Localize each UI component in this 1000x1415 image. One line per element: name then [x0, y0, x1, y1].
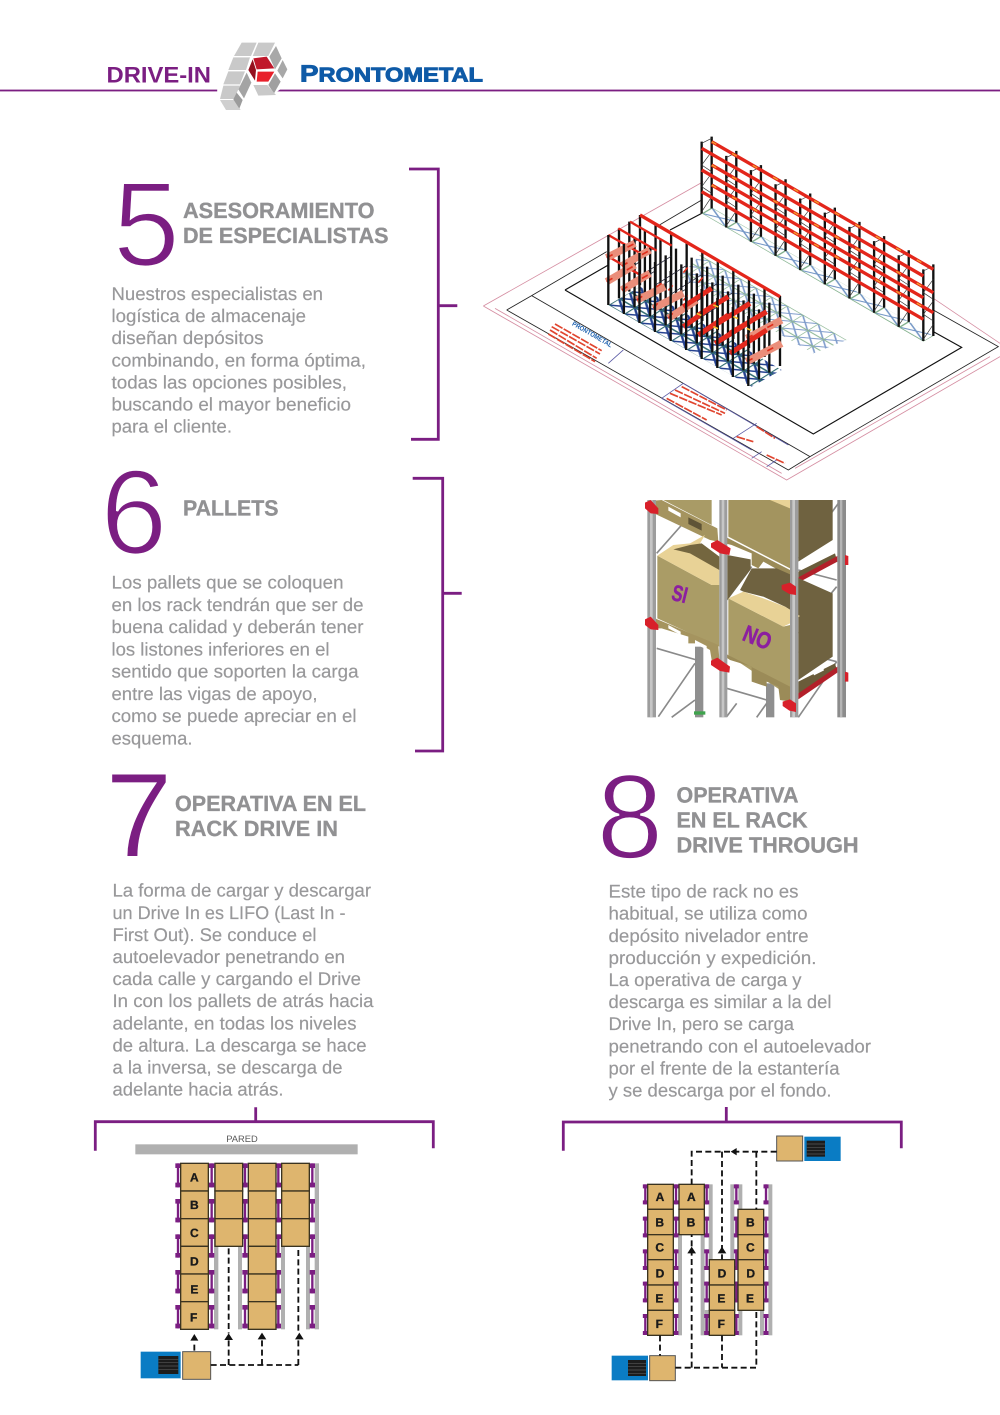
body text: un Drive In es LIFO (Last In -: [112, 902, 346, 923]
pallets column 3: F: [718, 1317, 725, 1331]
drive-in rack: [607, 215, 782, 387]
bracket: [95, 1107, 433, 1151]
section label: Drive-In: DRIVE-IN: [106, 62, 211, 87]
bracket: [409, 169, 457, 439]
heading: [175, 791, 366, 841]
body text: Este tipo de rack no es: [608, 880, 798, 902]
number 5: 5: [113, 158, 180, 292]
heading: PALLETS: [183, 496, 278, 521]
panel: 6 pallets: [100, 446, 462, 751]
title block: PRONTOMETAL: [571, 320, 613, 349]
pallets column 1: D: [656, 1266, 664, 1280]
panel: 5 asesoramiento: [112, 158, 457, 439]
heading: RACK DRIVE IN: [175, 816, 338, 841]
body text: In con los pallets de atrás hacia: [112, 990, 374, 1011]
body text: los listones inferiores en el: [112, 638, 330, 659]
route arrows: [190, 1248, 304, 1365]
body text: autoelevador penetrando en: [112, 946, 345, 967]
body text: [112, 283, 366, 437]
panel: 7 operativa drive in: [95, 748, 433, 1151]
body text: depósito nivelador entre: [608, 925, 808, 946]
heading: [183, 198, 388, 248]
body text: adelante, en todas los niveles: [112, 1012, 356, 1033]
body text: entre las vigas de apoyo,: [112, 683, 318, 704]
pallets column 2: B: [687, 1215, 695, 1229]
pallets column A-F: E: [190, 1282, 198, 1296]
icon: Prontometal logo mark: [217, 37, 293, 113]
pallets column A-F: B: [190, 1198, 199, 1212]
brand name: Prontometal: PRONTOMETAL: [300, 61, 483, 87]
body text: First Out). Se conduce el: [112, 924, 316, 945]
pallets column A-F: F: [190, 1310, 197, 1324]
pallet SI: [655, 535, 751, 660]
body text: penetrando con el autoelevador: [608, 1035, 871, 1056]
body text: producción y expedición.: [608, 947, 816, 968]
header rule: [0, 90, 1000, 91]
body text: por el frente de la estantería: [608, 1058, 840, 1078]
body text: La forma de cargar y descargar: [112, 880, 371, 901]
wall label: PARED: [226, 1134, 258, 1144]
pallets column 4: C: [746, 1241, 755, 1254]
label: NO: NO: [739, 620, 776, 655]
front uprights: [647, 500, 846, 717]
red beam connectors: [645, 500, 848, 712]
pallets column 3: E: [717, 1292, 725, 1305]
body text: combinando, en forma óptima,: [112, 349, 366, 370]
body text: como se puede apreciar en el: [112, 705, 356, 726]
rack uprights: [178, 1163, 319, 1329]
pallets column A-F: A: [190, 1170, 199, 1184]
front lattice extension: [680, 255, 847, 353]
pallets column 2: [679, 1184, 704, 1235]
pallets column 4: D: [746, 1266, 755, 1280]
body text: logística de almacenaje: [112, 305, 306, 326]
pallets column 4: E: [746, 1292, 754, 1305]
pallets column 1: F: [656, 1317, 663, 1331]
body text: adelante hacia atrás.: [112, 1079, 284, 1100]
body text: buscando el mayor beneficio: [112, 394, 351, 414]
route arrows: [660, 1148, 777, 1368]
heading: ASESORAMIENTO: [183, 198, 374, 223]
body text: [112, 572, 364, 748]
body text: todas las opciones posibles,: [112, 371, 347, 392]
number 7: 7: [106, 748, 172, 882]
diagram: drive-in operation: [135, 1134, 358, 1379]
heading: EN EL RACK: [676, 807, 808, 832]
forklift: exit: [777, 1136, 841, 1161]
pallets other columns: [215, 1163, 309, 1329]
forklift: entry: [612, 1356, 675, 1381]
body text: Nuestros especialistas en: [112, 283, 323, 304]
body text: buena calidad y deberán tener: [112, 616, 364, 637]
body text: diseñan depósitos: [112, 327, 264, 348]
rack uprights: [645, 1184, 772, 1335]
body text: en los rack tendrán que ser de: [112, 594, 364, 615]
body text: a la inversa, se descarga de: [112, 1056, 342, 1078]
body text: esquema.: [112, 727, 192, 748]
body text: La operativa de carga y: [608, 969, 802, 990]
body text: [608, 880, 871, 1101]
pallets column 3: D: [718, 1266, 726, 1280]
panel: 8 operativa drive through: [563, 750, 901, 1151]
pallets column 1: A: [656, 1190, 664, 1204]
heading: DE ESPECIALISTAS: [183, 223, 388, 248]
body text: de altura. La descarga se hace: [112, 1034, 366, 1055]
label: SI: SI: [669, 580, 690, 608]
diagram: drive-through operation: [612, 1136, 841, 1381]
heading: [676, 782, 858, 857]
forklift: [141, 1352, 211, 1379]
number 8: 8: [596, 750, 663, 884]
body text: para el cliente.: [112, 416, 232, 437]
header: [0, 37, 1000, 113]
pallets column 2: A: [687, 1190, 696, 1204]
body text: descarga es similar a la del: [608, 991, 832, 1012]
pallets column A-F: [181, 1163, 208, 1329]
title block: [548, 320, 788, 467]
body text: [112, 880, 374, 1100]
heading: OPERATIVA EN EL: [175, 791, 366, 816]
pallets column A-F: D: [190, 1254, 199, 1268]
body text: Drive In, pero se carga: [608, 1013, 795, 1034]
pallets column A-F: C: [190, 1226, 199, 1240]
pallets column 4: [738, 1209, 764, 1310]
plan outline: [483, 182, 1000, 480]
pallets column 1: E: [655, 1292, 663, 1305]
upper pallets: [654, 500, 837, 583]
heading: DRIVE THROUGH: [676, 832, 858, 857]
pallets column 3: [709, 1260, 735, 1335]
body text: y se descarga por el fondo.: [608, 1080, 832, 1101]
bracket: [413, 478, 462, 751]
back rack floor lattice: [702, 207, 933, 342]
rear uprights and braces: [657, 503, 838, 717]
wall: [135, 1144, 358, 1154]
pallets column 1: B: [655, 1215, 664, 1229]
figure: pallets on rack SI / NO: [645, 500, 848, 717]
number 6: 6: [100, 446, 167, 580]
pallets column 1: [648, 1184, 673, 1335]
pallets column 1: C: [655, 1241, 664, 1254]
pallet NO: [725, 568, 837, 702]
pallets column 4: B: [746, 1215, 755, 1229]
body text: habitual, se utiliza como: [608, 903, 808, 924]
back rack: [702, 137, 933, 341]
bracket: [563, 1107, 901, 1151]
body text: cada calle y cargando el Drive: [112, 968, 361, 989]
body text: Los pallets que se coloquen: [112, 572, 344, 593]
figure: isometric warehouse plan: [483, 137, 1000, 480]
heading: OPERATIVA: [676, 782, 799, 807]
body text: sentido que soporten la carga: [112, 661, 359, 682]
